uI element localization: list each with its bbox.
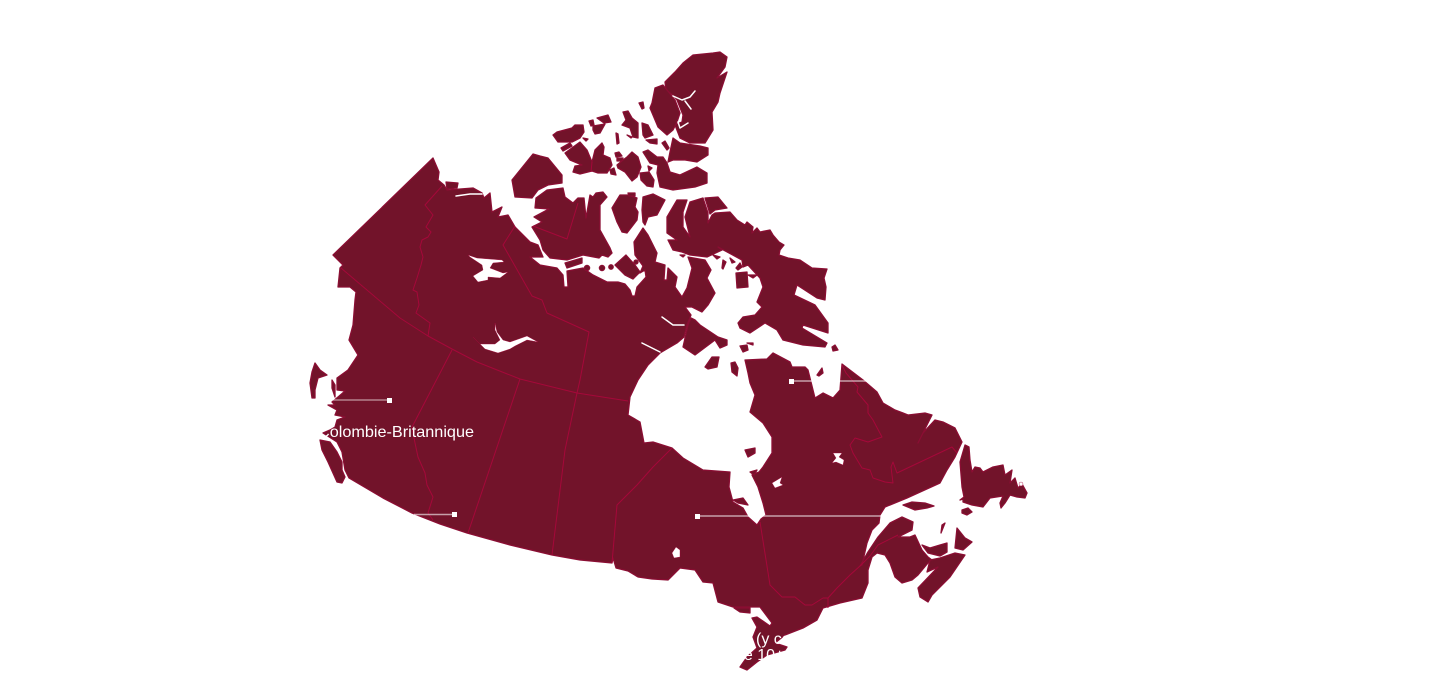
Alberta / Saskatchewan border xyxy=(468,379,520,533)
Great Slave Lake xyxy=(473,323,538,353)
Axel Heiberg Island xyxy=(650,85,680,135)
marker xyxy=(387,398,392,403)
Prince Edward Island xyxy=(922,543,947,556)
Magdalen Islands xyxy=(941,523,945,533)
callout: Alberta leader xyxy=(414,512,457,517)
Coats Island xyxy=(705,357,719,369)
Resolution Island xyxy=(832,345,838,351)
fjords and straits xyxy=(456,91,695,352)
Manicouagan Reservoir xyxy=(832,453,844,465)
Bathurst Island xyxy=(617,152,641,181)
Belcher Islands xyxy=(745,448,755,457)
Ontario / Quebec border xyxy=(760,522,828,608)
Ellesmere Island xyxy=(665,52,727,143)
Victoria Island border xyxy=(533,203,578,239)
land masses xyxy=(310,52,1027,670)
King William Island xyxy=(615,255,640,279)
map of Canada xyxy=(310,52,1027,670)
Prince Charles Island xyxy=(736,272,748,288)
Banks Island xyxy=(512,154,562,198)
Manitoba / Ontario border xyxy=(612,448,672,563)
Akpatok Island xyxy=(817,368,823,376)
Newfoundland xyxy=(960,445,1027,508)
callout: Quebec leader xyxy=(789,379,866,384)
NWT / Nunavut border xyxy=(503,226,589,393)
Saint-Pierre island xyxy=(962,508,972,515)
Quebec / Labrador border xyxy=(842,365,957,483)
callout: Ontario leader xyxy=(695,514,881,519)
Coronation Gulf island xyxy=(565,258,582,268)
Cape Breton Island xyxy=(955,528,972,550)
Devon Island xyxy=(643,150,707,190)
Melville Island xyxy=(565,142,612,174)
note on southern Ontario: de 10+ xyxy=(735,647,784,664)
Anticosti Island xyxy=(903,502,934,510)
60th parallel border xyxy=(341,268,628,401)
note on southern Ontario xyxy=(735,631,830,664)
Yukon / NWT border xyxy=(413,186,442,336)
Akimiski Island xyxy=(733,498,748,505)
Somerset Island xyxy=(642,194,665,225)
Queen Maud Gulf islets xyxy=(584,260,638,271)
Mansel Island xyxy=(731,362,738,376)
Nova Scotia xyxy=(918,553,965,602)
provincial borders xyxy=(341,162,957,608)
Great Bear Lake xyxy=(468,255,508,282)
Prince of Wales Island xyxy=(612,195,638,233)
sliver island xyxy=(628,193,635,196)
callout: Colombie-Britannique xyxy=(318,398,474,441)
Salisbury Island xyxy=(740,345,748,352)
Saskatchewan / Manitoba border xyxy=(552,393,577,555)
small Hudson Bay island xyxy=(750,470,757,475)
Mackenzie delta island xyxy=(446,182,458,189)
Queen Elizabeth islets xyxy=(553,102,669,187)
Melville Island border xyxy=(591,162,592,172)
leader line xyxy=(328,399,389,401)
coastal island xyxy=(332,380,335,397)
Victoria Island xyxy=(532,188,612,260)
Lake of the Woods xyxy=(672,547,680,558)
BC / Alberta border xyxy=(412,350,452,520)
Haida Gwaii xyxy=(310,363,327,398)
Nottingham Island xyxy=(747,343,753,345)
Quebec / New Brunswick border xyxy=(828,535,898,598)
Vancouver Island xyxy=(320,440,345,483)
mainland Canada xyxy=(323,158,962,670)
note on southern Ontario: (y compris xyxy=(756,631,830,648)
Foxe Basin islets xyxy=(680,255,757,278)
Baffin Island xyxy=(667,198,828,347)
Bylot Island xyxy=(705,197,727,214)
Lake Mistassini xyxy=(772,477,783,488)
Kivalliq peninsula xyxy=(683,318,727,355)
Manitoulin Island xyxy=(734,608,750,613)
Newfoundland pond xyxy=(1019,482,1023,486)
label: Colombie-Britannique xyxy=(318,424,474,441)
south Ellesmere lobe xyxy=(668,138,708,162)
